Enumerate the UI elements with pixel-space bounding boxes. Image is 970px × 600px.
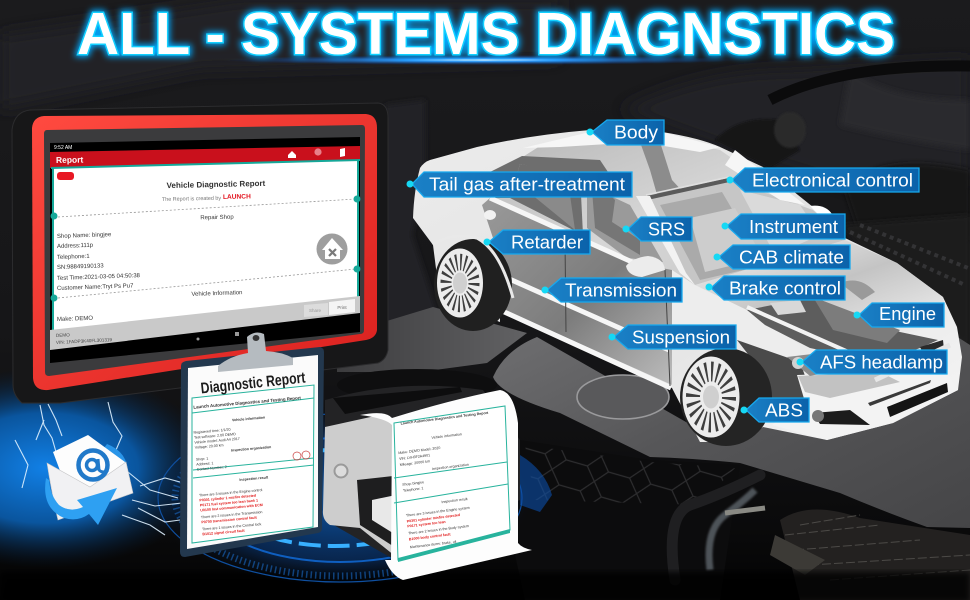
email icon: envelope body [47, 462, 133, 520]
car: front fender [672, 270, 800, 372]
tablet: red frame [32, 114, 377, 390]
clipboard: report text: Inspection result [239, 475, 269, 482]
background: hex grille [505, 440, 740, 600]
lightning around the email icon [15, 402, 182, 535]
label: CAB climate: CAB climate [739, 246, 844, 268]
tablet: report text: Repair Shop [200, 215, 234, 221]
printed report sheet: Make: DEMO Model: 2020 [398, 446, 441, 455]
printed report sheet: There are 3 issues in the Engine system [406, 506, 470, 518]
tablet: report shop icon [316, 234, 348, 264]
tablet [12, 103, 388, 403]
tablet: report text: Address:111p [57, 243, 94, 250]
email icon: arrow [45, 478, 117, 525]
tablet: bezel [44, 125, 365, 376]
label: Engine: Engine [879, 303, 936, 324]
car: belt line and door sills [490, 198, 671, 388]
clipboard: report text: Launch Automotive Diagnostics and Testing Report [193, 395, 302, 410]
label: Body: Body [614, 122, 659, 142]
tablet: footer and buttons [50, 296, 360, 350]
clipboard: report text: Voltage: 20.00 km [195, 443, 224, 450]
clipboard: clip [218, 333, 293, 372]
clipboard: report text: Test software: 2.00 DEMO [194, 432, 236, 440]
label: ABS: ABS [765, 400, 803, 420]
tablet: report text: SN:98849190133 [57, 263, 104, 271]
car: engine bay [747, 280, 938, 366]
car: body shell [413, 130, 962, 442]
clipboard: report text: U0100 lost communication with ECM [200, 503, 263, 512]
tablet: report text: Telephone:1 [57, 254, 90, 261]
car: greenhouse glass [490, 138, 845, 285]
label: ABS [740, 398, 809, 422]
printed report sheet: Telephone: 1 [403, 486, 424, 493]
email icon: at sign [78, 450, 108, 480]
tablet: report text: Customer Name:Tryt Ps Pu7 [57, 283, 134, 292]
car: side mirror [626, 256, 665, 277]
clipboard: report text: Inspection organization [231, 445, 271, 453]
label: Instrument: Instrument [749, 216, 838, 237]
email icon: letter sheet [53, 435, 125, 492]
car: headlamp [787, 354, 828, 376]
clipboard: board [180, 347, 324, 557]
tablet: report page [53, 160, 359, 332]
clipboard: report text: P0301 cylinder 1 misfire detected [199, 494, 256, 503]
tablet: red header bar: 9:52 AM [54, 145, 72, 151]
printed report sheet: Launch Automotive Diagnostics and Testing Report [400, 411, 489, 426]
tablet: report text: LAUNCH [223, 193, 251, 201]
printed report sheet: Inspection organization [432, 463, 469, 471]
tablet: DEMO [56, 332, 70, 338]
printed report sheet: VIN: LVH3F2A4901 [399, 453, 430, 461]
title streak [222, 55, 742, 65]
label: Body [586, 120, 664, 145]
tablet: report text: Vehicle Diagnostic Report [167, 179, 266, 190]
printed report sheet: There are 2 issues in the Body system [408, 524, 469, 535]
car: A pillar [636, 196, 695, 285]
label: Suspension: Suspension [632, 326, 730, 348]
car: door panels [482, 198, 672, 385]
clipboard: paper [187, 355, 318, 549]
printed report sheet: Vehicle information [431, 432, 462, 440]
tablet: report text: Make: DEMO [57, 316, 93, 323]
car: front suspension [737, 340, 812, 425]
car: B pillar [640, 142, 695, 205]
label: SRS: SRS [648, 218, 685, 240]
clipboard: heading: Diagnostic Report [200, 370, 306, 397]
car: hood [695, 240, 948, 335]
label: SRS [622, 217, 692, 241]
label: CAB climate [714, 245, 850, 269]
blue glow and HUD rings [0, 368, 552, 586]
clipboard: report text: Address: 1 [196, 461, 214, 467]
printer [323, 386, 520, 560]
car: rear wheel [433, 236, 513, 331]
label: Instrument [722, 214, 845, 239]
clipboard: report text [191, 395, 313, 536]
car: rear door opening hinge [484, 210, 496, 220]
label: Tail gas after-treatment: Tail gas after-treatment [429, 174, 625, 194]
tablet: screen black base [50, 137, 360, 363]
car: rear side window [510, 164, 583, 235]
tablet: rubber bumper [12, 103, 388, 403]
clipboard: report text: There are 3 issues in the Engine control [199, 488, 263, 498]
tablet: report text: Vehicle Information [191, 290, 243, 298]
clipboard: report text: Vehicle information [232, 415, 265, 422]
printed report sheet: Maintenance items: brake, oil [410, 540, 457, 549]
email icon [45, 435, 133, 525]
tablet: VIN: 1FADP3K40FL301319 [56, 337, 113, 345]
car: front side window [587, 185, 663, 262]
printed report sheet: P0171 system too lean [407, 520, 446, 529]
label: Engine [854, 303, 944, 327]
printed report sheet: P0301 cylinder misfire detected [407, 513, 460, 524]
label: Transmission [542, 278, 682, 302]
car: front bumper [772, 340, 958, 440]
printed report sheet: Inspection result [441, 497, 468, 504]
title: ALL - SYSTEMS DIAGNSTICS [77, 1, 895, 67]
background: left grey cover under tablet [337, 307, 527, 372]
email icon: back swirl [104, 444, 128, 474]
label: Transmission: Transmission [565, 280, 677, 300]
clipboard: report text: Shop: 1 [196, 457, 208, 462]
car: front wheel [680, 348, 772, 446]
label: Retarder [484, 230, 590, 254]
car: roof band [523, 132, 720, 152]
tablet: Print [337, 305, 347, 310]
printed report sheet: B1000 body control fault [409, 532, 452, 541]
car [413, 130, 962, 446]
clipboard: report text: P0171 fuel system too lean bank 1 [200, 498, 258, 507]
clipboard: report text: B1012 signal circuit fault [202, 529, 246, 536]
clipboard [180, 333, 324, 557]
label: AFS headlamp: AFS headlamp [820, 352, 943, 372]
tablet: report text: Test Time:2021-03-05 04:50:38 [57, 273, 141, 282]
printed report sheet: Mileage: 20000 km [400, 459, 430, 467]
background: cover ring [577, 375, 669, 419]
label: Brake control: Brake control [729, 278, 841, 298]
tablet: report text: The Report is created by [162, 196, 221, 203]
tablet: report text: Shop Name: bingjee [57, 232, 112, 240]
background: lower hoses and textured cover [0, 475, 970, 600]
clipboard: report text: There are 2 issues in the Transmission [201, 510, 263, 519]
clipboard: report text: There are 1 issues in the Central lock [202, 522, 262, 531]
printed report sheet [360, 390, 532, 580]
label: Brake control [706, 276, 845, 300]
background: engine cover [493, 290, 970, 528]
clipboard: report text: P0700 transmission control fault [201, 516, 258, 524]
car: windshield [647, 180, 845, 285]
printed report sheet: Shop: bingjee [402, 480, 424, 487]
clipboard: report text: Registered time: 1/1/20 [193, 428, 231, 435]
label: Retarder: Retarder [511, 232, 583, 252]
tablet: red header bar: Report [56, 155, 84, 165]
tablet: red header bar [50, 145, 360, 168]
tablet: report text [57, 179, 266, 323]
tablet: Share [309, 308, 321, 313]
clipboard: report text: Contact Number: 2 [197, 465, 227, 472]
clipboard: report text: Vehicle model: Audi A4 2017 [194, 437, 240, 445]
title: ALL - SYSTEMS DIAGNSTICS [77, 1, 895, 67]
label: Electronical control: Electronical control [752, 170, 913, 190]
label: Suspension [608, 325, 736, 349]
car: rear roof interior [490, 156, 612, 198]
